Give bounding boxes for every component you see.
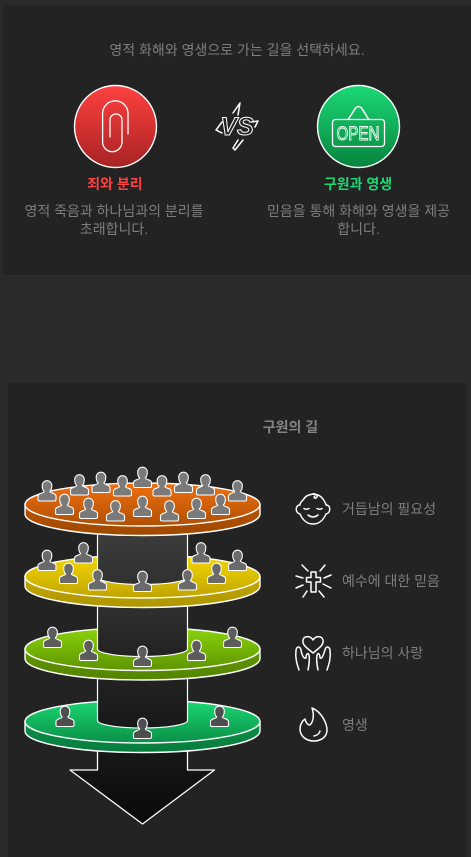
heading: path of salvation: 구원의 길: [263, 419, 318, 435]
label: sin and separation: 죄와 분리: [87, 176, 143, 192]
icon: baby face: [296, 494, 330, 524]
arrow: downward: [70, 750, 214, 824]
label: love of God: 하나님의 사랑: [342, 645, 423, 661]
icon: VS lightning: VS: [220, 113, 254, 141]
icon: VS lightning: [216, 103, 258, 150]
icon: green open sign circle: [318, 86, 400, 168]
label: faith in Jesus: 예수에 대한 믿음: [342, 573, 440, 589]
text: salvation description: 합니다.: [337, 221, 380, 237]
people: lime level: [44, 627, 242, 666]
level: yellow disk: [25, 534, 260, 608]
icon: flame: [300, 708, 327, 741]
heading: choose the path: 영적 화해와 영생으로 가는 길을 선택하세요.: [109, 42, 365, 58]
label: eternal life: 영생: [342, 717, 368, 733]
icon: red paperclip circle: [74, 86, 156, 168]
people: yellow level: [38, 543, 246, 592]
cylinder: third segment: [98, 678, 188, 728]
label: salvation and eternal life: 구원과 영생: [324, 176, 392, 192]
level: emerald disk: [25, 678, 260, 752]
text: sin description: 초래합니다.: [80, 221, 148, 237]
icon: radiant cross: [296, 565, 331, 597]
panel: top comparison: [3, 5, 471, 275]
cylinder: second segment: [98, 606, 188, 657]
level: orange disk: [25, 467, 260, 536]
text: sin description: 영적 죽음과 하나님과의 분리를: [24, 203, 204, 219]
panel: path diagram: [8, 383, 466, 857]
level: lime disk: [25, 606, 260, 680]
icon: heart in hands: [296, 637, 330, 670]
cylinder: first segment: [98, 534, 188, 584]
label: need for rebirth: 거듭남의 필요성: [342, 501, 436, 517]
text: salvation description: 믿음을 통해 화해와 영생을 제공: [267, 203, 450, 219]
people: emerald level: [56, 706, 228, 738]
people: orange level: [38, 467, 246, 521]
icon: green open sign circle: OPEN: [336, 124, 380, 145]
